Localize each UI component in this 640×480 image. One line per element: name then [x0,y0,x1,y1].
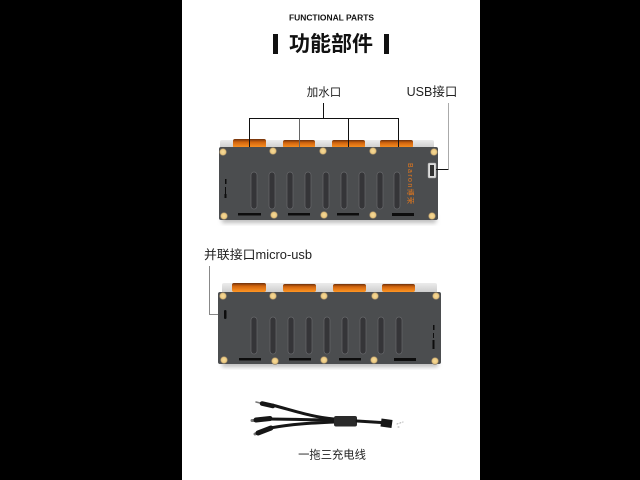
charging cable [252,402,403,434]
label: cable: 一拖三充电线 [298,448,366,462]
device: top view [219,139,438,223]
callout line: USB port [436,103,448,170]
device: bottom view [218,283,441,367]
label: water inlets: 加水口 [307,86,341,99]
callout lines: water inlets [250,103,398,147]
label: parallel micro-usb port: 并联接口micro-usb [204,247,312,262]
label: USB port: USB接口 [407,84,457,99]
callout line: micro-usb port [210,266,223,314]
title with side bars: 功能部件 [289,33,373,56]
english subtitle: FUNCTIONAL PARTS [289,14,375,22]
device: top view: Baron博荣 [406,163,415,204]
white page panel [182,0,480,480]
